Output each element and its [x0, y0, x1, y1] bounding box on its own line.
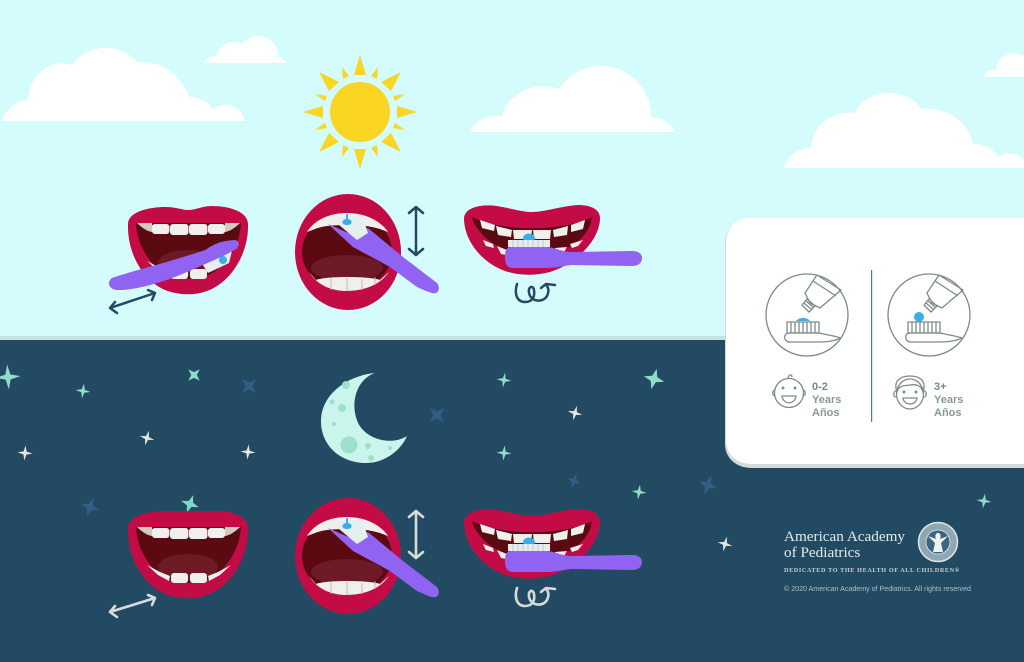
toothpaste — [342, 518, 352, 529]
seal — [918, 522, 958, 562]
arrow: night horizontal — [110, 595, 155, 617]
arrow: night vertical — [409, 511, 423, 558]
label: 3+ years: 3+ — [934, 381, 947, 393]
logo: American Academy of Pediatrics — [784, 522, 971, 593]
toothbrush head — [508, 544, 550, 551]
arrow: day circular — [516, 284, 555, 302]
toothbrush head — [508, 240, 550, 247]
icon: baby face — [773, 375, 805, 408]
cloud: right edge — [983, 53, 1024, 77]
logo: American Academy of Pediatrics: of Pediatrics — [784, 544, 860, 561]
tagline: DEDICATED TO THE HEALTH OF ALL CHILDREN® — [784, 567, 960, 574]
toothbrush head — [333, 215, 368, 240]
icon: moon — [321, 373, 407, 463]
toothbrush — [505, 551, 642, 572]
label: 0-2 years: 0-2 — [812, 381, 828, 393]
toothbrush — [505, 247, 642, 268]
toothbrush head — [333, 519, 368, 544]
mouth: day side-to-side brushing — [109, 206, 248, 294]
mouth: night vertical brushing — [295, 498, 439, 614]
arrow: night circular — [516, 588, 555, 606]
cloud: right large — [784, 93, 1024, 168]
mouth: day circular brushing — [464, 205, 642, 275]
panel: toothpaste amount card — [725, 218, 1024, 468]
divider — [871, 270, 872, 422]
icon: child face — [894, 376, 926, 409]
toothbrush — [109, 240, 239, 290]
icon: pea of toothpaste on brush — [888, 274, 970, 356]
toothpaste — [342, 214, 352, 225]
logo: American Academy of Pediatrics: American Academy — [784, 528, 905, 545]
cloud: centre — [470, 66, 675, 132]
panel: day sky — [0, 0, 1024, 340]
panel: toothpaste amount card: Años — [812, 407, 840, 419]
stars — [0, 364, 992, 553]
mouth: night side-to-side brushing — [128, 511, 248, 598]
cloud: upper left — [2, 48, 245, 121]
icon: sun — [303, 55, 417, 169]
panel: night sky — [0, 340, 1024, 662]
arrow: day horizontal — [110, 290, 155, 313]
cloud: small top — [204, 36, 287, 63]
copyright: © 2020 American Academy of Pediatrics. All rights reserved — [784, 585, 971, 593]
panel: toothpaste amount card: Years — [812, 394, 841, 406]
toothpaste — [523, 538, 535, 546]
mouth: night circular brushing — [464, 509, 642, 579]
toothbrush — [328, 224, 439, 293]
panel: toothpaste amount card: Years — [934, 394, 963, 406]
toothbrush — [328, 528, 439, 597]
toothbrush head — [201, 247, 233, 273]
toothpaste — [523, 234, 535, 242]
panel: toothpaste amount card: Años — [934, 407, 962, 419]
arrow: day vertical — [409, 207, 423, 255]
icon: smear of toothpaste on brush — [766, 274, 848, 356]
mouth: day vertical brushing — [295, 194, 439, 310]
